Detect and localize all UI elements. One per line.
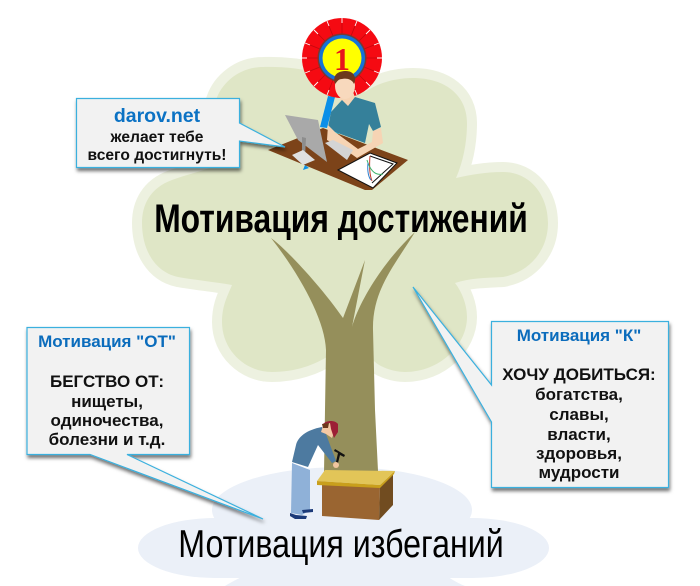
keyboard: [325, 140, 353, 160]
rosette medal: [302, 18, 382, 170]
callout: motivation TOWARDS: мудрости: [539, 463, 619, 482]
head: [321, 423, 335, 438]
person at desk: [268, 71, 408, 190]
callout: motivation FROM: одиночества,: [51, 411, 163, 430]
rosette medal: 1: [334, 41, 350, 77]
shirt: [328, 97, 381, 143]
hammer: [334, 449, 345, 463]
bottom title: Мотивация избеганий: [178, 522, 504, 566]
callout: motivation FROM: нищеты,: [71, 392, 143, 411]
callout: motivation TOWARDS: Мотивация "К": [517, 326, 641, 345]
callout: motivation FROM: болезни и т.д.: [49, 430, 165, 449]
head: [335, 73, 355, 99]
main title: Мотивация достижений: [154, 195, 528, 241]
monitor: [285, 115, 327, 162]
tree crown: [142, 67, 548, 372]
callout: motivation TOWARDS: власти,: [547, 425, 611, 444]
box: [322, 484, 380, 520]
callout: motivation TOWARDS: [413, 287, 668, 488]
callout: motivation TOWARDS: здоровья,: [536, 444, 622, 463]
callout: darov.net: [76, 98, 285, 168]
paper with chart: [338, 153, 397, 188]
callout: motivation FROM: БЕГСТВО ОТ:: [50, 372, 164, 391]
callout: motivation FROM: Мотивация "ОТ": [38, 332, 176, 351]
legs: [291, 463, 310, 515]
tree trunk: [271, 232, 415, 473]
callout: motivation TOWARDS: богатства,: [535, 385, 623, 404]
ribbon: [320, 96, 335, 128]
callout: darov.net: всего достигнуть!: [88, 147, 226, 164]
worker with hammer: [290, 421, 395, 520]
callout: darov.net: darov.net: [114, 105, 201, 127]
torso: [292, 427, 336, 467]
callout: motivation TOWARDS: славы,: [549, 405, 609, 424]
callout: motivation TOWARDS: ХОЧУ ДОБИТЬСЯ:: [502, 365, 656, 384]
bottom cloud: avoidance: [138, 467, 549, 586]
desk: [268, 128, 408, 190]
callout: motivation FROM: [27, 328, 263, 519]
arms: [327, 125, 383, 158]
neck: [340, 92, 356, 108]
callout: darov.net: желает тебе: [110, 129, 204, 146]
